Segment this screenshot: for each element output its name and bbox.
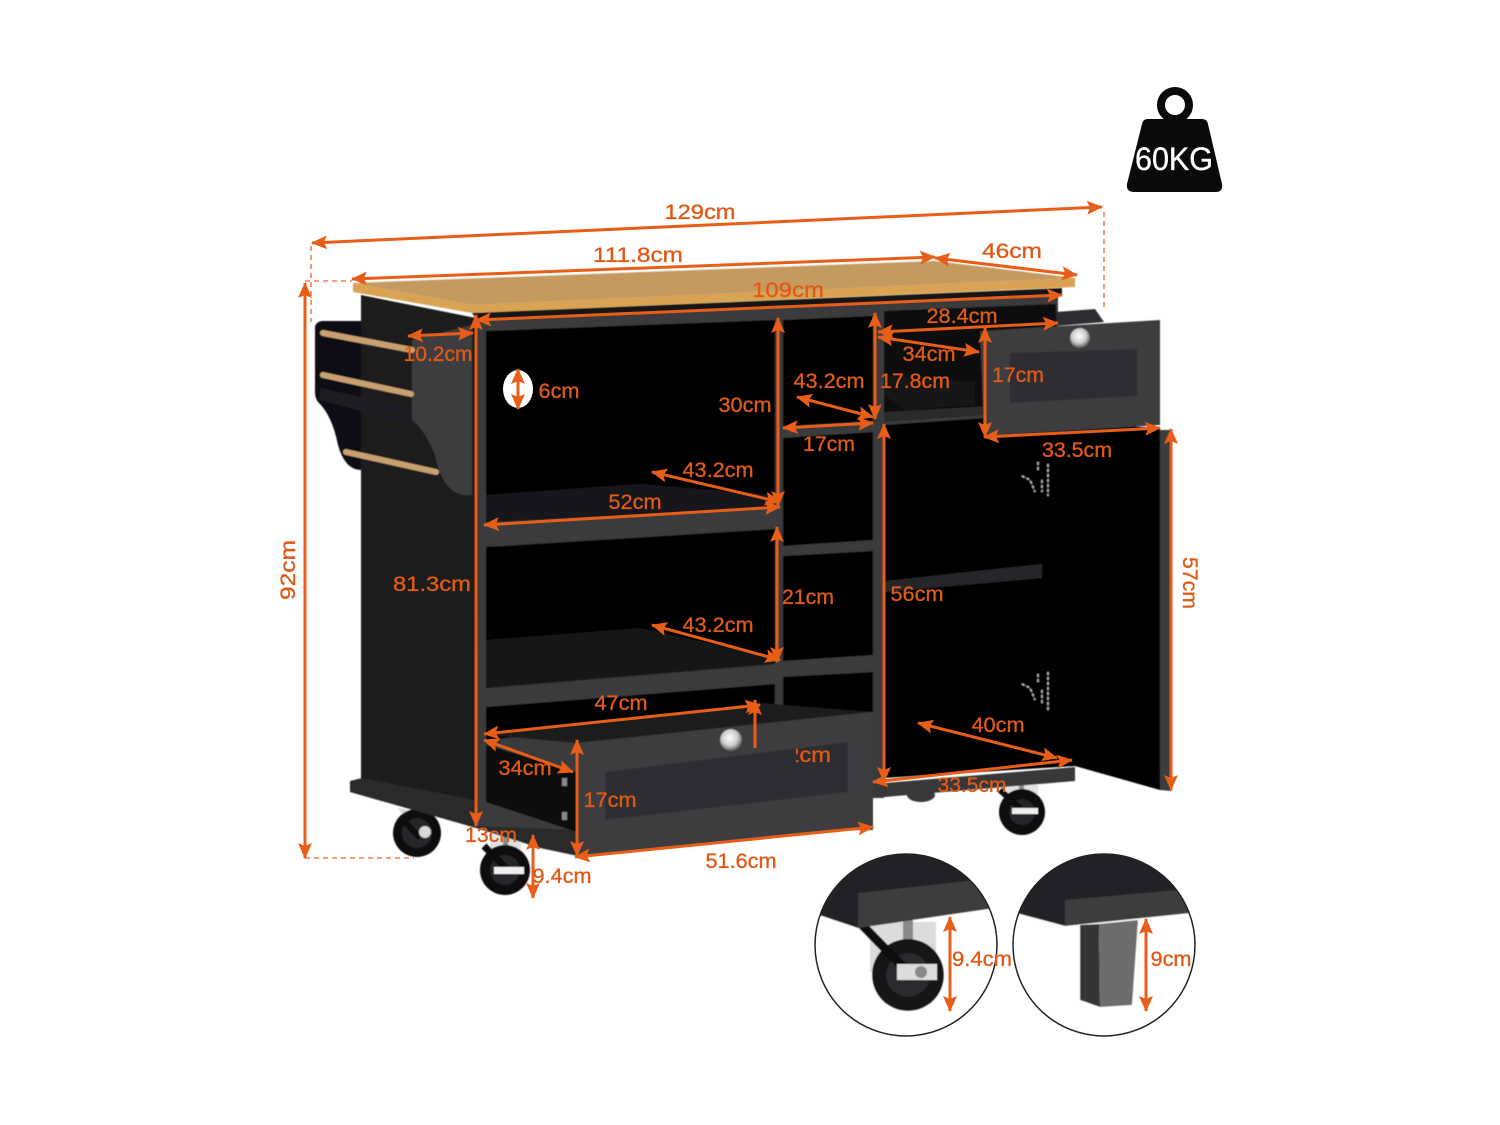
- dimension: 92cm: 92cm: [276, 540, 300, 600]
- dimension: 111.8cm: [352, 243, 935, 279]
- dimension: 43.2cm lower shelf: [652, 613, 780, 660]
- inset: caster detail: [810, 850, 1000, 1040]
- dimension: 17cm top drawer: [985, 328, 1044, 437]
- dimension: 33.5cm bottom: 33.5cm: [938, 773, 1006, 797]
- bottom drawer: [486, 703, 872, 857]
- dimension: 57cm: 57cm: [1178, 557, 1202, 609]
- door edge: [1160, 430, 1171, 791]
- caster: front left: [480, 832, 530, 895]
- compartment: upper left: [486, 320, 775, 522]
- dimension: 6cm hole: 6cm: [538, 379, 580, 403]
- dimension: 9.4cm caster: 9.4cm: [532, 864, 592, 888]
- icon: 60KG weight: 60KG: [1135, 141, 1213, 177]
- dimension: 43.2cm center: 43.2cm: [794, 369, 864, 393]
- dimension: 10.2cm: 10.2cm: [404, 342, 472, 366]
- dimension: 28.4cm: 28.4cm: [926, 304, 998, 328]
- compartment: lower left: [486, 529, 775, 688]
- dimension: inset 9cm: [1146, 919, 1192, 1011]
- dimension: 81.3cm: 81.3cm: [393, 572, 471, 596]
- dimension: 6cm hole: [503, 369, 580, 409]
- dimension: 12cm partly hidden: [755, 700, 831, 767]
- door hinge top: [1022, 462, 1048, 496]
- dimension: 52cm: [484, 490, 780, 525]
- dimension: 17cm top drawer: 17cm: [992, 363, 1044, 387]
- dimension: 109cm: [476, 278, 1062, 320]
- right compartment interior: [884, 418, 1160, 790]
- dimension: 109cm: 109cm: [752, 278, 824, 302]
- dimension: inset 9.4cm: 9.4cm: [952, 947, 1012, 971]
- dimension: 47cm: [484, 691, 760, 734]
- dimension: 43.2cm upper shelf: [652, 458, 780, 502]
- spice rack: [315, 321, 472, 495]
- dimension: 17cm drawer: [577, 740, 636, 856]
- dimension: 17.8cm: 17.8cm: [880, 369, 950, 393]
- left side panel: [361, 295, 476, 826]
- dimension: 17.8cm: [875, 313, 950, 419]
- dimension: 51.6cm: 51.6cm: [706, 849, 776, 873]
- dimension: 9.4cm caster: [532, 835, 592, 898]
- dimension: inset 9.4cm: [950, 917, 1012, 1011]
- dimension: 46cm: [935, 239, 1077, 275]
- dimension: 40cm: 40cm: [972, 713, 1024, 737]
- dimension: 43.2cm lower shelf: 43.2cm: [682, 613, 754, 637]
- dimension: 129cm: [312, 200, 1102, 243]
- dimension: 12cm partly hidden: 12cm: [773, 743, 831, 767]
- base plate: [350, 778, 578, 856]
- leg stub: [907, 788, 935, 802]
- dimension: 34cm upper: 34cm: [902, 342, 956, 366]
- top drawer: [980, 309, 1160, 436]
- dimension: 21cm: 21cm: [782, 585, 834, 609]
- dimension: 47cm: 47cm: [594, 691, 648, 715]
- compartment: below shelf: [486, 684, 775, 740]
- bottom strip: [873, 767, 1075, 798]
- dimension: 43.2cm upper shelf: 43.2cm: [682, 458, 754, 482]
- dimension: 40cm: [918, 713, 1057, 758]
- dimension: inset 9cm: 9cm: [1150, 947, 1192, 971]
- dimension: 52cm: 52cm: [608, 490, 662, 514]
- front frame: [476, 294, 1058, 830]
- icon: 60KG weight: [1127, 91, 1222, 192]
- dimension: 129cm: 129cm: [664, 200, 736, 224]
- door hinge bottom: [1022, 672, 1048, 712]
- dimension: 33.5cm top drawer: 33.5cm: [1042, 438, 1112, 462]
- inset: leg detail: [1005, 850, 1200, 1040]
- dimension: 51.6cm: [575, 827, 873, 873]
- caster: back left: [393, 808, 441, 857]
- dimension: 17cm center: [783, 423, 873, 456]
- dimension: 46cm: 46cm: [982, 239, 1042, 263]
- dimension: 33.5cm top drawer: [984, 428, 1160, 462]
- dimension: 28.4cm: [878, 304, 1058, 332]
- dimension: 56cm: 56cm: [890, 582, 944, 606]
- interior shelf: [885, 564, 1042, 592]
- central cubbies: [783, 316, 873, 720]
- dimension: 111.8cm: 111.8cm: [593, 243, 683, 267]
- dimension: 34cm lower: [484, 740, 573, 780]
- cabinet: kitchen island: [315, 261, 1171, 895]
- caster: right: [999, 780, 1045, 835]
- dimension: 30cm: 30cm: [718, 393, 772, 417]
- dimension: 34cm lower: 34cm: [498, 756, 552, 780]
- guide lines: [305, 212, 1104, 858]
- dimension: 21cm: [777, 527, 834, 662]
- dimension: 17cm center: 17cm: [803, 432, 855, 456]
- dimension: 34cm upper: [878, 337, 979, 366]
- dimension: 17cm drawer: 17cm: [584, 788, 636, 812]
- dimension: 13cm: 13cm: [465, 823, 517, 847]
- dimension: 33.5cm bottom: [873, 760, 1072, 797]
- upper right opening: [884, 304, 1056, 414]
- dimension: 43.2cm center: [794, 369, 873, 417]
- countertop: [353, 261, 1075, 319]
